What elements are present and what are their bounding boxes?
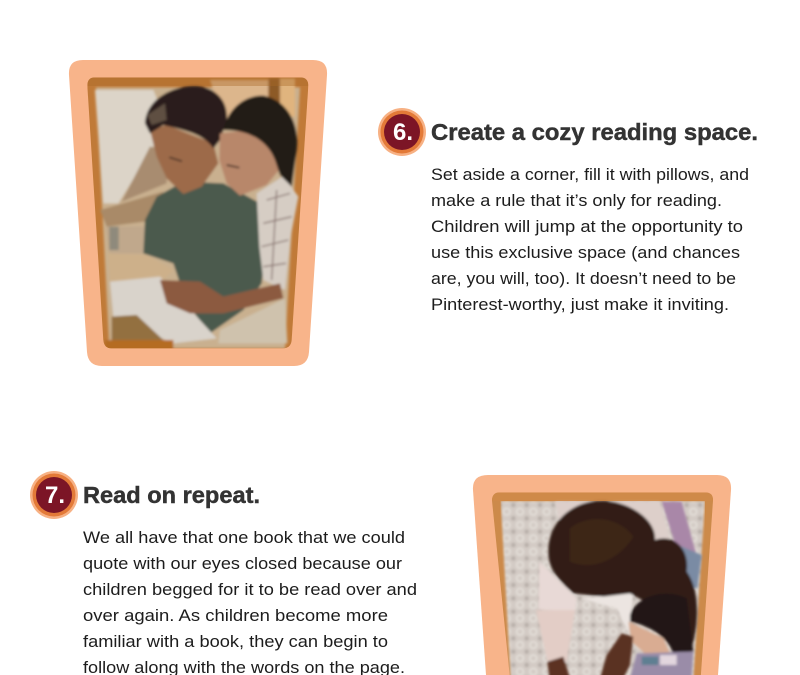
photo: children reading a book xyxy=(83,73,313,353)
boy's shirt xyxy=(143,182,268,333)
photo panel: mother and daughter reading xyxy=(473,475,731,675)
photo frame: peach trapezoid xyxy=(473,475,731,675)
mother's arm and top xyxy=(538,562,577,612)
body text 6: use this exclusive space (and chances xyxy=(431,243,740,262)
book xyxy=(108,253,173,282)
body text 7: familiar with a book, they can begin to xyxy=(83,632,388,651)
body text 7: quote with our eyes closed because our xyxy=(83,554,402,573)
number badge 7 xyxy=(30,471,78,519)
body text 7 xyxy=(83,528,417,675)
toddler's arm xyxy=(600,633,633,675)
girl's checked shirt xyxy=(257,176,298,290)
trousers xyxy=(218,298,287,343)
toddler's dress xyxy=(630,652,693,675)
body text 7: We all have that one book that we could xyxy=(83,528,405,547)
number badge 6 xyxy=(378,108,426,156)
photo: mother and toddler on a rug xyxy=(490,488,717,675)
heading 7: Read on repeat. xyxy=(83,482,260,508)
body text 6: make a rule that it’s only for reading. xyxy=(431,191,722,210)
photo frame: peach trapezoid xyxy=(69,60,327,366)
body text 6: Set aside a corner, fill it with pillows, and xyxy=(431,165,749,184)
body text 7: children begged for it to be read over and xyxy=(83,580,417,599)
number badge 7: 7. xyxy=(45,482,65,509)
girl's face xyxy=(219,130,282,196)
heading 6: Create a cozy reading space. xyxy=(431,119,758,145)
facial details xyxy=(169,157,239,168)
step 6 block xyxy=(378,108,758,314)
girl's hair xyxy=(223,96,297,187)
body text 7: over again. As children become more xyxy=(83,606,388,625)
body text 6: Pinterest-worthy, just make it inviting. xyxy=(431,295,729,314)
toddler's face xyxy=(628,622,670,655)
body text 6: are, you will, too). It doesn’t need to be xyxy=(431,269,736,288)
step 7 block xyxy=(30,471,417,675)
boy's hair xyxy=(145,86,227,148)
arms xyxy=(160,280,283,313)
number badge 6: 6. xyxy=(393,119,413,146)
toddler's hair xyxy=(630,594,693,653)
body text 6: Children will jump at the opportunity to xyxy=(431,217,743,236)
photo panel: two children reading xyxy=(69,60,327,366)
body text 6 xyxy=(431,165,749,314)
boy's face xyxy=(150,125,218,194)
mother's curly hair xyxy=(548,501,697,652)
